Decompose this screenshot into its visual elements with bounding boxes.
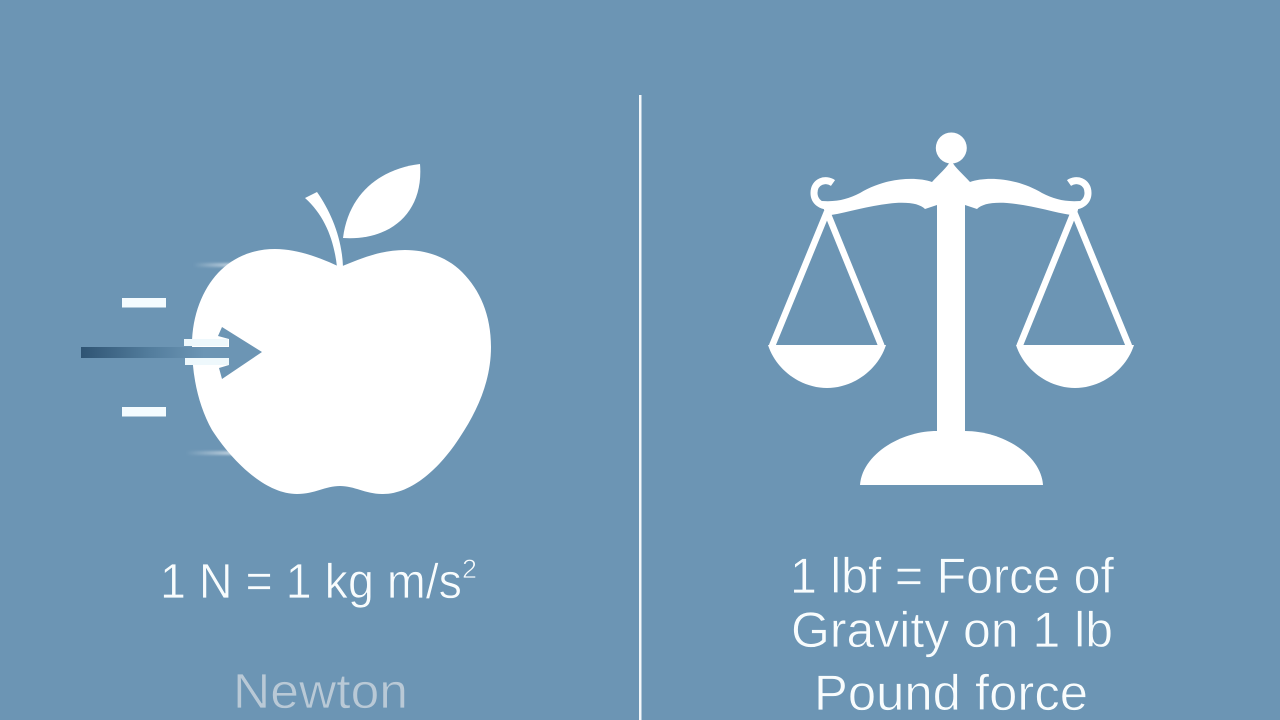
motion streak top [193, 263, 235, 267]
motion streak bottom [186, 451, 236, 455]
dash lower [122, 407, 166, 416]
base [860, 431, 1043, 485]
panel: pound force [768, 132, 1134, 720]
pan right [1016, 212, 1134, 388]
label: pound force: Pound force [814, 665, 1088, 720]
formula: newton: 2 [462, 554, 477, 584]
label: newton: Newton [233, 665, 408, 719]
hook left [814, 181, 833, 206]
apple body [192, 249, 491, 494]
apple leaf [343, 164, 420, 238]
icon: apple with force arrow [81, 164, 491, 494]
icon: balance scale [768, 132, 1134, 485]
hook right [1069, 181, 1088, 206]
pan left [768, 212, 886, 388]
definition: pound force [790, 548, 1114, 658]
force arrow [81, 327, 262, 379]
beam [822, 160, 1080, 215]
apple stem [305, 192, 343, 267]
formula: newton: 1 N = 1 kg m/s [160, 555, 462, 609]
dash upper [122, 298, 166, 308]
divider [639, 95, 642, 720]
finial [936, 132, 967, 164]
definition: pound force: Gravity on 1 lb [791, 602, 1113, 658]
panel: newton [81, 164, 491, 719]
pillar [937, 190, 965, 435]
definition: pound force: 1 lbf = Force of [790, 548, 1114, 604]
